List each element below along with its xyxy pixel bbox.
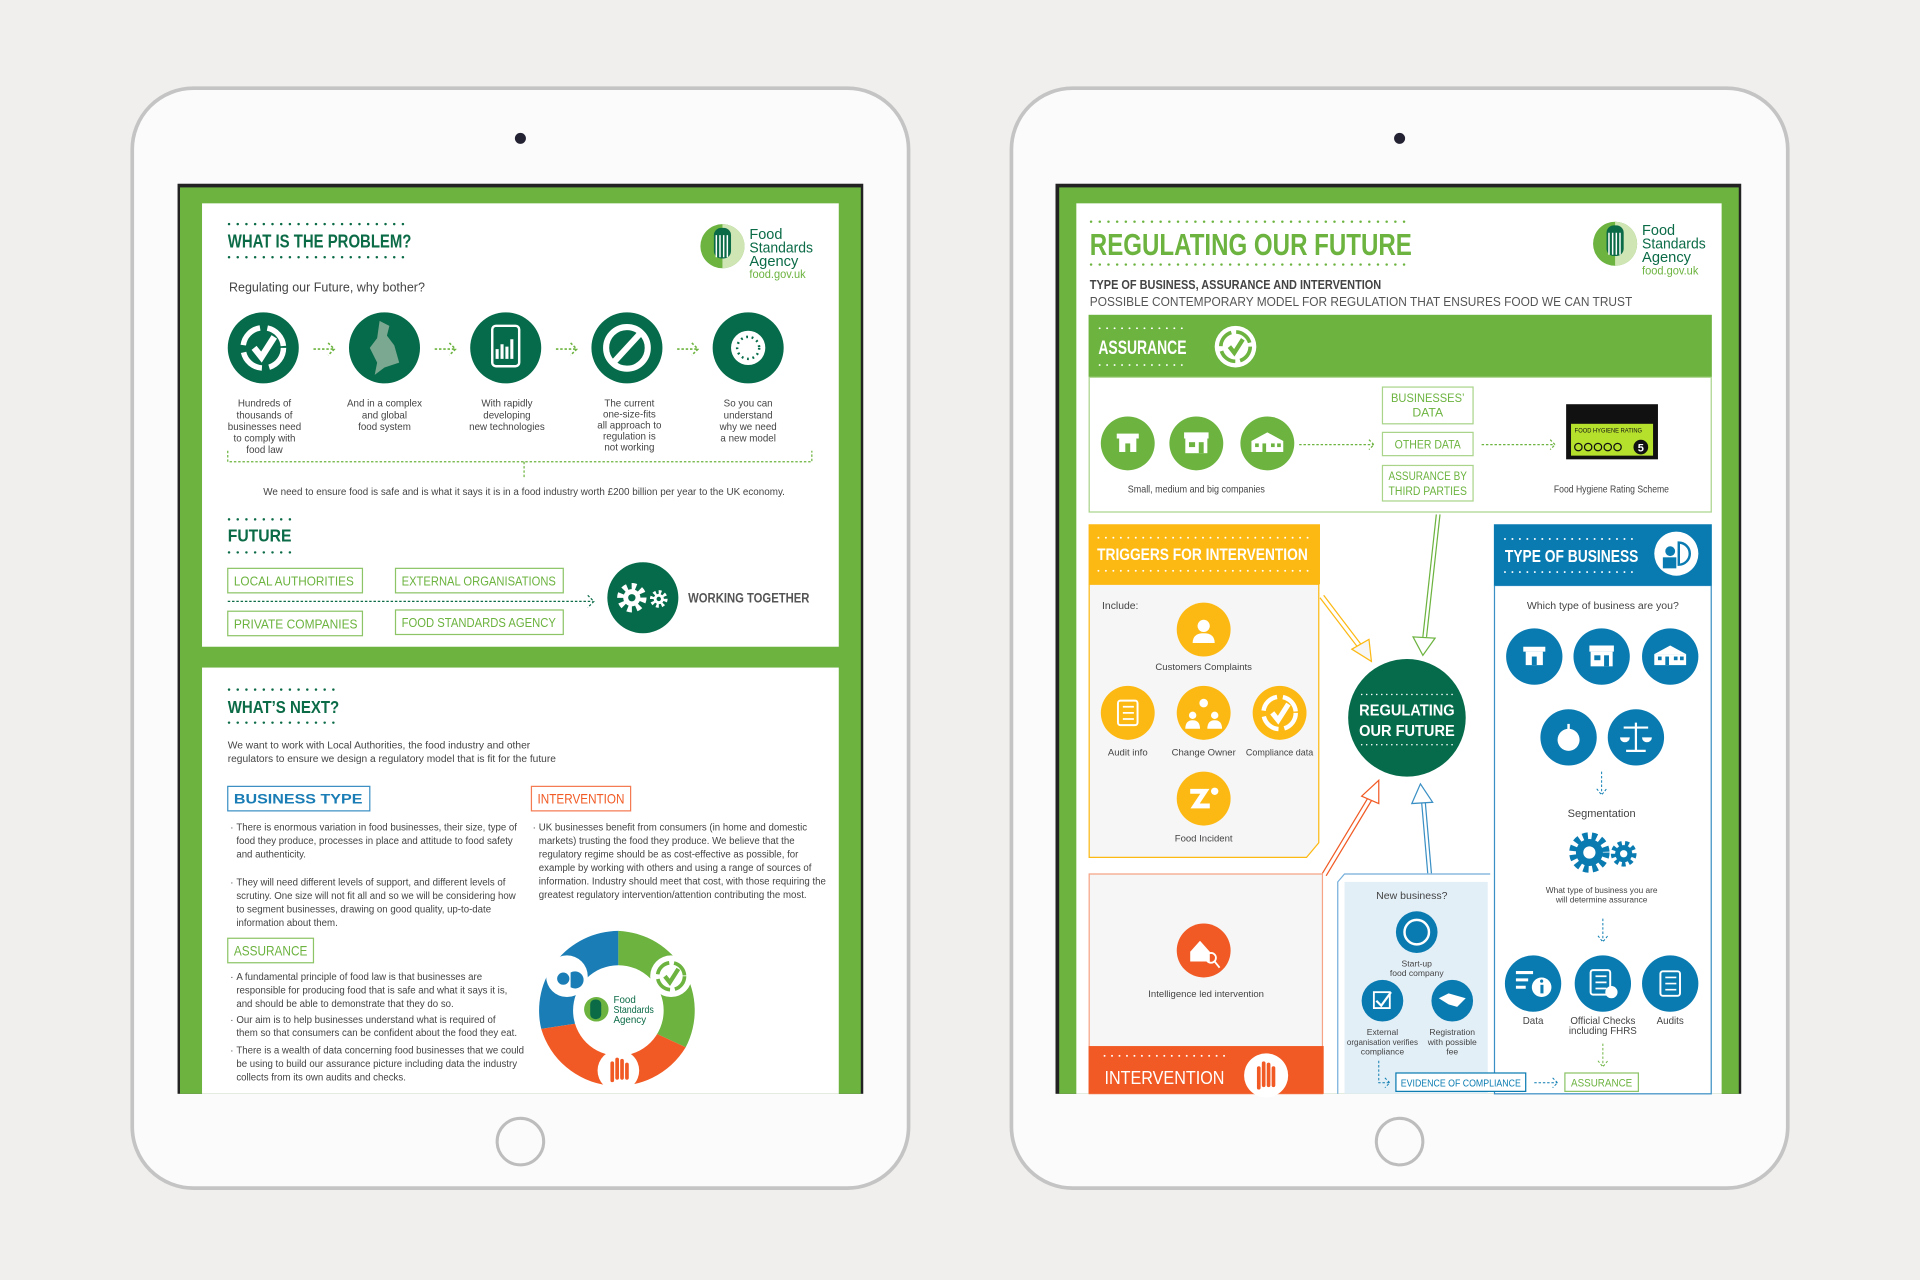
chart: cycle diagram [539,931,695,1091]
box: intervention [531,786,631,811]
future boxes: FOOD STANDARDS AGENCY [402,615,556,630]
icons: company sizes [1101,416,1294,470]
panel: type of business: Segmentation [1568,808,1636,820]
icon: camera right [1394,133,1405,144]
box: evidence of compliance: EVIDENCE OF COMPLIANCE [1401,1078,1521,1089]
text: assurance bullets: Our aim is to help businesses understand what is required of [236,1015,496,1026]
panel: triggers for intervention: Change Owner [1172,748,1237,759]
panel: new business [1338,874,1490,1094]
future boxes: PRIVATE COMPANIES [234,616,358,631]
center: regulating our future: REGULATING [1359,702,1455,719]
captions: food law [246,445,284,456]
text: business type bullets: They will need different levels of support, and different levels of [236,878,506,889]
heading: future: FUTURE [228,525,291,545]
subtitles: TYPE OF BUSINESS, ASSURANCE AND INTERVENTION [1090,277,1381,292]
box: assurance: ASSURANCE [234,943,307,958]
captions: understand [724,410,773,421]
panel: new business: food company [1390,968,1444,978]
panel: type of business: Official Checks [1570,1016,1635,1027]
logo: FSA right: Food [1642,223,1675,239]
icon: gears working together [607,562,678,633]
panel: intervention: INTERVENTION [1104,1067,1224,1088]
center: regulating our future [1348,659,1466,777]
panel: triggers for intervention: Compliance data [1246,748,1314,759]
panel: type of business: Which type of business are you? [1527,600,1679,612]
center: regulating our future: OUR FUTURE [1359,723,1455,740]
panel: triggers for intervention: TRIGGERS FOR INTERVENTION [1097,545,1308,564]
text: business type bullets: · [230,878,233,889]
panel: new business: compliance [1361,1047,1404,1057]
arrow: triggers to center [1320,595,1371,661]
panel: intervention: Intelligence led intervention [1148,989,1264,1000]
subtitles: POSSIBLE CONTEMPORARY MODEL FOR REGULATION THAT ENSURES FOOD WE CAN TRUST [1090,294,1632,309]
captions: The current [604,399,655,410]
text: intervention bullets [533,822,826,901]
icon: assurance check [1215,326,1256,367]
data boxes: THIRD PARTIES [1389,484,1467,498]
captions: So you can [724,399,773,410]
logo: FSA: Standards [749,240,813,256]
panel: type of business: Audits [1657,1016,1684,1027]
logo: FSA right [1593,222,1706,277]
text: business type bullets: information about them. [236,918,338,929]
heading: regulating our future: REGULATING OUR FUTURE [1090,228,1412,262]
captions: not working [604,443,654,454]
subtitles [1090,277,1632,309]
captions: new technologies [469,422,545,433]
text: intervention bullets: information. Industry should meet that cost, with those requiring the [539,876,826,887]
captions: regulation is [603,432,656,443]
panel: new business: New business? [1376,890,1448,902]
icon: camera left [515,133,526,144]
logo: FSA: food.gov.uk [749,268,806,281]
data boxes: DATA [1412,405,1444,419]
captions: and global [362,410,407,421]
text: intervention bullets: UK businesses benefit from consumers (in home and domestic [539,822,807,833]
captions: one-size-fits [603,410,656,421]
text: intervention bullets: example by working with others and using a range of sources of [539,863,812,874]
panel: type of business: will determine assurance [1555,895,1648,905]
captions: And in a complex [347,399,422,410]
icon: hand [1244,1053,1288,1097]
text: business type bullets: and authenticity. [236,849,306,860]
tablet: right [1011,88,1788,1188]
captions: Hundreds of [238,399,291,410]
panel: type of business: Data [1523,1016,1544,1027]
text: intervention bullets: · [533,822,536,833]
heading: what is the problem: WHAT IS THE PROBLEM? [228,230,411,251]
panel: new business: External [1367,1027,1398,1037]
future boxes: EXTERNAL ORGANISATIONS [402,573,556,588]
panel: what is the problem: WORKING TOGETHER [688,591,810,606]
captions: to comply with [234,434,295,445]
panel: assurance: Small, medium and big companies [1128,484,1265,495]
logo: FSA: Agency [749,254,799,270]
logo: FSA: Food [749,227,782,243]
panel: triggers for intervention: Customers Complaints [1155,662,1252,673]
captions: developing [483,410,531,421]
heading: what's next: WHAT’S NEXT? [228,697,339,717]
text: business type bullets: scrutiny. One size will not fit all and so we will be considering how [236,891,516,902]
panel: type of business [1494,524,1712,1094]
panel: type of business: TYPE OF BUSINESS [1505,546,1638,566]
box: assurance [228,938,313,963]
future boxes [228,568,563,636]
icon: FHRS sign: 5 [1638,442,1644,454]
panel: new business: with possible [1427,1037,1477,1047]
captions [228,399,777,456]
captions: why we need [719,422,777,433]
box: business type: BUSINESS TYPE [234,792,362,807]
box: assurance result: ASSURANCE [1571,1077,1632,1089]
arrow: intervention to center [1322,780,1379,876]
icons: assurance sources [1505,955,1698,1012]
panel: triggers for intervention: Audit info [1108,748,1148,759]
text: assurance bullets: and should be able to demonstrate that they do so. [236,999,454,1010]
text: business type bullets [230,822,517,929]
panel: new business: organisation verifies [1347,1037,1418,1047]
subtitle: Regulating our Future, why bother? [229,280,425,295]
box: intervention: INTERVENTION [538,792,624,807]
icon row [228,312,784,383]
intro text: regulators to ensure we design a regulatory model that is fit for the future [228,753,556,765]
intro text [228,739,556,765]
text: business type bullets: There is enormous variation in food businesses, their size, type of [236,822,517,833]
captions: a new model [720,434,776,445]
panel: new business: Start-up [1402,958,1432,968]
logo: FSA right: food.gov.uk [1642,264,1699,277]
icon: intelligence led [1177,924,1231,977]
text: assurance bullets: A fundamental principle of food law is that businesses are [236,972,482,983]
captions: businesses need [228,422,301,433]
text: assurance bullets: · [230,1045,233,1056]
panel: type of business: including FHRS [1569,1026,1637,1037]
home button right [1376,1118,1423,1165]
icon: FHRS sign: FOOD HYGIENE RATING [1575,427,1642,434]
icon: FHRS sign [1566,404,1658,459]
box: evidence of compliance [1396,1073,1526,1091]
text: assurance bullets: There is a wealth of data concerning food businesses that we could [236,1045,524,1056]
text: assurance bullets [230,972,524,1083]
panel: assurance [1089,315,1712,512]
panel: intervention [1089,874,1324,1097]
arrow: assurance to center [1413,514,1440,655]
chart: cycle diagram: Agency [613,1015,646,1026]
arrow: new business to center [1412,784,1433,873]
text: assurance bullets: · [230,1015,233,1026]
captions: all approach to [597,421,662,432]
data boxes [1382,387,1473,501]
text: assurance bullets: be using to build our assurance picture including data the industry [236,1059,517,1070]
text: business type bullets: · [230,822,233,833]
text: assurance bullets: collects from its own audits and checks. [236,1072,406,1083]
panel: new business: fee [1446,1047,1458,1057]
captions: thousands of [236,410,293,421]
panel: triggers for intervention: Include: [1102,601,1138,612]
statement: We need to ensure food is safe and is what it says it is in a food industry worth £200 billion per year to the UK economy. [263,486,785,498]
text: intervention bullets: regulatory regime should be as cost-effective as possible, for [539,849,799,860]
box: assurance result [1565,1073,1638,1091]
icon: segmentation gears [1573,837,1633,868]
logo: FSA right: Standards [1642,237,1706,253]
panel: assurance: ASSURANCE [1098,337,1187,359]
logo: FSA [700,224,813,281]
panel: type of business: What type of business you are [1546,885,1658,895]
text: assurance bullets: · [230,972,233,983]
data boxes: OTHER DATA [1395,437,1462,451]
captions: food system [358,422,411,433]
panel: triggers for intervention [1089,524,1320,857]
box: business type [228,786,370,811]
future boxes: LOCAL AUTHORITIES [234,573,354,588]
captions: With rapidly [481,399,533,410]
chart: cycle diagram: Food [613,995,636,1006]
text: business type bullets: to segment businesses, drawing on good quality, up-to-date [236,905,491,916]
data boxes: ASSURANCE BY [1389,469,1467,483]
panel: assurance: Food Hygiene Rating Scheme [1554,484,1669,495]
data boxes: BUSINESSES’ [1391,391,1464,405]
tablet: left [132,88,909,1188]
arrow: evidence to assurance [1534,1078,1558,1088]
panel: what's next [202,668,839,1094]
chart: cycle diagram: Standards [613,1005,654,1016]
panel: new business: Registration [1429,1027,1475,1037]
text: assurance bullets: them so that consumers can be confident about the food they eat. [236,1028,517,1039]
text: business type bullets: food they produce, processes in place and attitude to food safety [236,836,513,847]
text: intervention bullets: greatest regulatory intervention/attention contributing the most. [539,890,807,901]
text: intervention bullets: markets) trusting the food they produce. We believe that the [539,836,795,847]
panel: triggers for intervention: Food Incident [1175,833,1233,844]
icon: business type [1654,532,1698,576]
home button left [497,1118,544,1165]
text: assurance bullets: responsible for producing food that is safe and what it says it is, [236,985,507,996]
icons: business types [1506,628,1698,766]
icons: triggers [1101,603,1307,826]
panel: what is the problem [202,203,839,647]
logo: FSA right: Agency [1642,250,1692,266]
intro text: We want to work with Local Authorities, the food industry and other [228,739,531,751]
